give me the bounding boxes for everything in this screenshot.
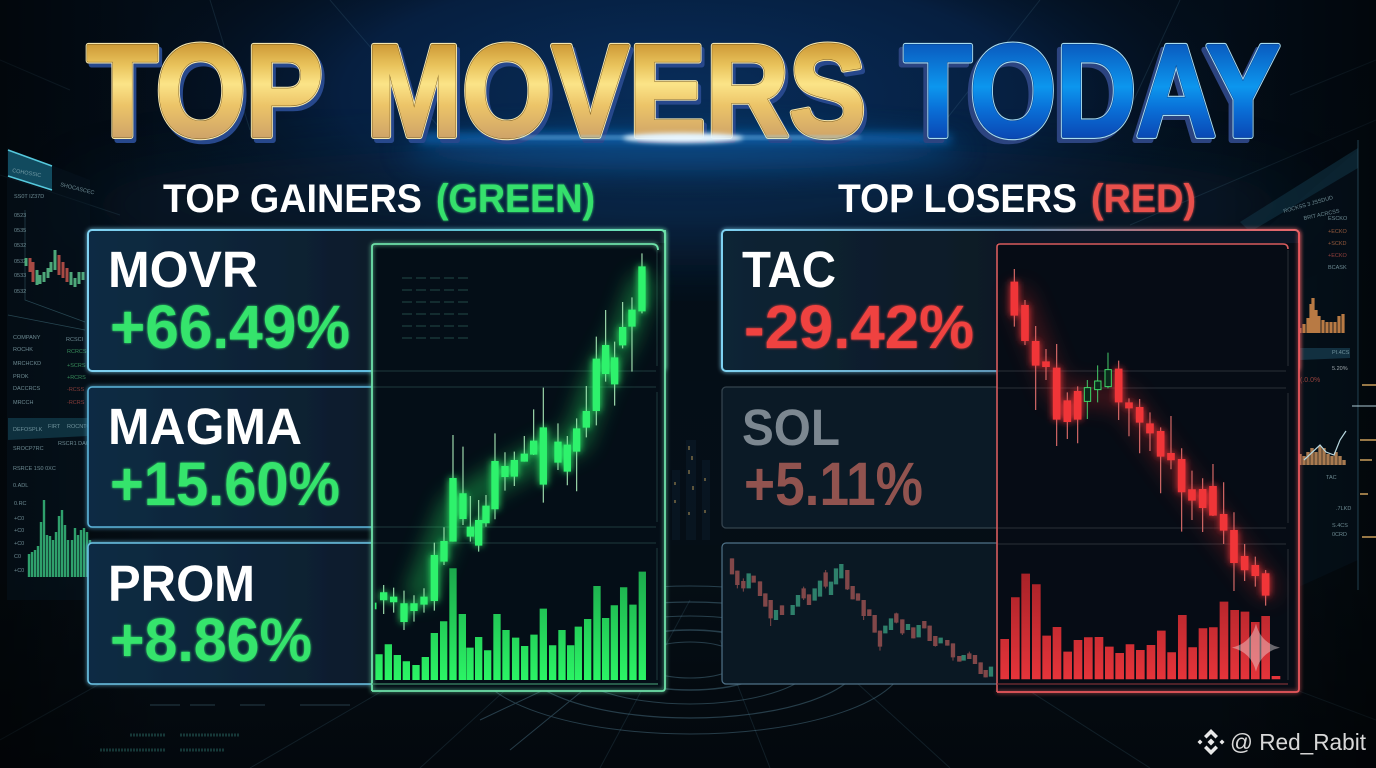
right HUD dashboards: (.0.0% [1300,377,1320,384]
right HUD dashboards: TAC [1326,475,1337,481]
watermark: @ Red_Rabit [1230,729,1367,755]
card: dimmed mini chart [722,543,1292,684]
left HUD dashboards: 0532 [14,243,26,249]
faint table [402,278,468,338]
title: TOP MOVERS: TOP [87,17,323,164]
red frame [997,244,1288,692]
card: PROM: +8.86% [110,606,312,674]
right HUD dashboards: ESCKO [1328,216,1348,222]
green frame [372,230,665,691]
left HUD dashboards: 0535 [14,228,26,234]
card: SOL (dimmed) [722,387,1292,528]
title: TOP MOVERS: MOVERS [366,17,866,164]
card: PROM [88,543,658,684]
card: PROM: PROM [108,555,255,612]
radial arcs [100,586,905,750]
left HUD dashboards: +C0 [14,568,24,574]
left HUD dashboards: DACCRCS [13,386,41,392]
left HUD dashboards: COHOSSIC [12,168,42,179]
panel: gainers [88,230,665,684]
candle wicks [384,253,642,630]
left HUD dashboards: ROCHK [13,347,33,353]
title: TODAY: TODAY [904,17,1280,164]
left HUD dashboards: DEFOSPLK [13,427,43,433]
left HUD dashboards: 0.RC [14,501,27,507]
title flare [520,133,860,143]
card: TAC: TAC [742,241,836,298]
left HUD dashboards: +C0 [14,528,24,534]
title: TOP MOVERS [87,17,869,168]
left HUD dashboards: +C0 [14,516,24,522]
left HUD dashboards: +C0 [14,541,24,547]
panel: losers [722,230,1299,684]
card: MAGMA: +15.60% [110,450,340,518]
right HUD dashboards: BRIT ACRCSS [1303,208,1341,222]
left HUD dashboards: -RCRS [67,400,85,406]
left HUD dashboards [7,148,95,600]
candle glow [420,287,642,590]
heading: top gainers: TOP GAINERS [163,177,422,221]
title: TOP MOVERS: TOP [87,17,323,164]
card: MOVR: MOVR [108,241,258,298]
card: SOL (dimmed): +5.11% [744,450,923,518]
right HUD dashboards: +ECKO [1328,229,1348,235]
right HUD dashboards: ROCKSS 3 JSSDUD [1283,195,1334,215]
chart: losers candlesticks and volume [997,232,1299,692]
right HUD dashboards: +SCKD [1328,241,1347,247]
volume bars [1005,574,1276,679]
title: TODAY: TODAY [904,17,1280,164]
left HUD dashboards: MRCCH [13,400,33,406]
chart: dim candlesticks [732,558,991,677]
volume bars [379,568,642,680]
card: MAGMA [88,387,658,527]
card: MAGMA: MAGMA [108,398,302,455]
left HUD dashboards: 0532 [14,259,26,265]
left HUD dashboards: RSCR1 DAC [58,441,90,447]
right HUD dashboards [1240,140,1376,600]
candle bodies [1014,282,1266,596]
left HUD dashboards: RCRCS [67,349,87,355]
left HUD dashboards: SROCP7RC [13,446,44,452]
heading: top losers: TOP LOSERS [838,177,1077,221]
left HUD dashboards: FIRT [48,424,61,430]
right HUD dashboards: PI.4CS [1332,350,1350,356]
left HUD dashboards: MRCHCKD [13,361,41,367]
left HUD dashboards: PROK [13,374,29,380]
right HUD dashboards: S.4CS [1332,523,1348,529]
candle bodies [373,603,378,609]
candle glow [1020,298,1267,588]
candle wicks [1014,269,1266,606]
heading: top gainers [163,177,595,221]
card: SOL (dimmed): SOL [742,399,840,456]
right HUD dashboards: +ECKO [1328,253,1348,259]
title: TOP MOVERS: MOVERS [366,17,866,164]
card: TAC: -29.42% [744,293,974,361]
card: TAC [722,230,1299,371]
left HUD dashboards: 0.ADL [13,483,28,489]
right HUD dashboards: 0CRD [1332,532,1347,538]
chart: gainers candlesticks and volume [372,230,665,691]
card: MOVR [88,230,665,371]
left HUD dashboards: 0533 [14,273,26,279]
sparkle mark [1232,624,1280,672]
right HUD dashboards: 5.20% [1332,366,1348,372]
title: TODAY: TODAY [900,21,1276,168]
right HUD dashboards: BCASK [1328,265,1347,271]
heading: top losers: (RED) [1091,177,1196,221]
heading: top gainers: (GREEN) [436,177,595,221]
card: MOVR: +66.49% [110,293,350,361]
title: TOP MOVERS: MOVERS [369,21,869,168]
title glow line [403,130,963,170]
left HUD dashboards: -RCSS [67,387,84,393]
green reversal candles [1087,353,1108,419]
left HUD dashboards: C0 [14,554,21,560]
title [87,17,1280,170]
right HUD dashboards: .7LKD [1336,506,1351,512]
left HUD dashboards: SHOCASCEC [60,182,95,196]
left HUD dashboards: 0532 [14,289,26,295]
left HUD dashboards: RCSCI [66,337,84,343]
left HUD dashboards: SS0T IZ37D [14,194,44,200]
left HUD dashboards: COMPANY [13,335,41,341]
left HUD dashboards: +SCRS [67,363,86,369]
title: TOP MOVERS: MOVERS [366,17,866,164]
title: TOP MOVERS: TOP [90,21,326,168]
title: TOP MOVERS: TOP [87,17,323,164]
left HUD dashboards: ROCNTC [67,424,91,430]
left HUD dashboards: 0523 [14,213,26,219]
title: TODAY: TODAY [904,17,1280,164]
icon: binance diamond [1198,729,1224,755]
left HUD dashboards: RSRCE 1S0 0XC [13,466,56,472]
left HUD dashboards: +RCRS [67,375,86,381]
centre city backdrop [665,380,722,545]
